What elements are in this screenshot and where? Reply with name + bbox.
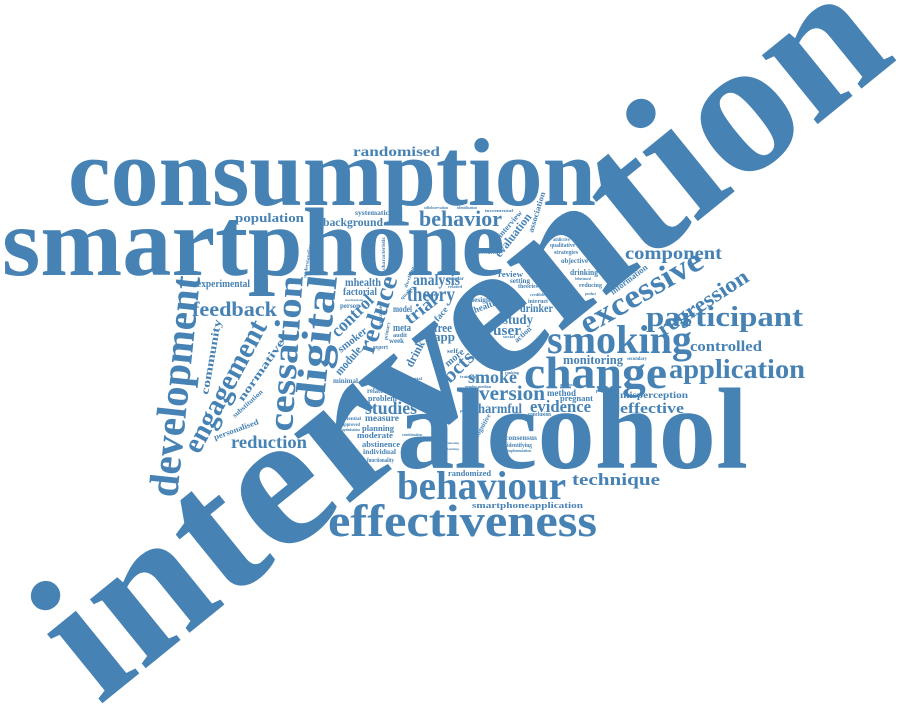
small rotated words: module bbox=[332, 343, 365, 378]
small labelled words: systematic bbox=[355, 209, 389, 217]
word: technique: technique bbox=[572, 470, 661, 489]
word: smartphone: smartphone bbox=[2, 189, 505, 297]
small labelled words: identification bbox=[457, 205, 478, 210]
small labelled words: related bbox=[448, 284, 463, 289]
small labelled words: self bbox=[447, 349, 459, 355]
word: consumption: consumption bbox=[68, 119, 596, 226]
small labelled words: functionality bbox=[367, 458, 394, 464]
small labelled words: misperception bbox=[620, 390, 688, 400]
small labelled words: audit bbox=[393, 333, 407, 339]
word: drinker: drinker bbox=[520, 301, 554, 315]
small labelled words: induction bbox=[374, 381, 388, 385]
word: alcohol: alcohol bbox=[397, 366, 748, 493]
small labelled words: gender median bbox=[465, 384, 492, 389]
small rotated words: cognitive bbox=[473, 412, 493, 439]
small labelled words: meta bbox=[393, 323, 411, 334]
small labelled words: product bbox=[460, 408, 473, 413]
small rotated words: health bbox=[472, 297, 498, 315]
small labelled words: combination bbox=[402, 432, 423, 437]
word: effectiveness: effectiveness bbox=[328, 495, 597, 546]
small rotated words: personalised bbox=[213, 417, 260, 442]
word: study: study bbox=[503, 313, 533, 328]
small labelled words: experimental bbox=[197, 279, 250, 290]
small labelled words: planning bbox=[362, 424, 394, 433]
word: component: component bbox=[625, 243, 722, 263]
small labelled words: mhealth bbox=[345, 275, 381, 289]
small labelled words: internet bbox=[528, 299, 548, 305]
small rotated words bbox=[199, 190, 649, 442]
small labelled words: social bbox=[503, 334, 516, 339]
small labelled words: reducing bbox=[579, 283, 602, 289]
small labelled words: product bbox=[585, 291, 597, 296]
small labelled words: potential bbox=[341, 417, 362, 422]
small rotated words: interview bbox=[496, 208, 524, 239]
small labelled words: expert bbox=[373, 345, 388, 351]
word: reduce: reduce bbox=[351, 272, 403, 357]
word: app: app bbox=[434, 329, 455, 344]
small rotated words: evaluation bbox=[491, 210, 535, 260]
word: excessive: excessive bbox=[573, 242, 710, 342]
small labelled words: credible bbox=[530, 292, 545, 297]
word: reduction: reduction bbox=[231, 432, 307, 452]
small labelled words: addictive bbox=[553, 238, 571, 243]
small labelled words: setting bbox=[510, 277, 530, 285]
small labelled words: review bbox=[498, 270, 523, 279]
small labelled words bbox=[197, 205, 688, 510]
word: theory: theory bbox=[407, 284, 455, 306]
word: harmful: harmful bbox=[478, 402, 522, 417]
word: randomised: randomised bbox=[353, 145, 440, 160]
small labelled words: drinking bbox=[570, 268, 598, 277]
small labelled words: optimisation bbox=[342, 427, 361, 432]
word: user: user bbox=[493, 323, 521, 339]
small labelled words: theories bbox=[518, 284, 539, 290]
small labelled words: objective bbox=[561, 257, 588, 265]
word: feedback: feedback bbox=[192, 297, 277, 321]
small rotated words: substitution bbox=[231, 388, 265, 419]
small labelled words: pregnant bbox=[560, 394, 593, 403]
small labelled words: measure bbox=[365, 413, 399, 423]
word: development: development bbox=[141, 273, 210, 499]
word: smoke: smoke bbox=[468, 367, 517, 387]
word: application: application bbox=[669, 354, 805, 384]
small labelled words: identifying bbox=[507, 443, 532, 449]
small labelled words: method bbox=[547, 388, 576, 398]
small rotated words: more bbox=[443, 346, 467, 369]
small labelled words: factorial bbox=[343, 286, 377, 298]
small rotated words: information bbox=[608, 262, 649, 297]
small labelled words: design bbox=[470, 296, 490, 304]
word: change: change bbox=[524, 347, 667, 398]
small labelled words: individual bbox=[363, 448, 396, 456]
small labelled words: mechanism bbox=[345, 298, 363, 302]
word: analysis: analysis bbox=[413, 272, 460, 289]
small rotated words: action bbox=[512, 324, 534, 344]
small rotated words: face bbox=[432, 305, 450, 323]
small labelled words: training bbox=[460, 374, 476, 379]
small rotated words: normative bbox=[236, 337, 287, 404]
small labelled words: person bbox=[340, 302, 360, 310]
small labelled words: minimal bbox=[333, 377, 358, 385]
word: behaviour: behaviour bbox=[397, 463, 566, 508]
small rotated words: dwelling bbox=[404, 266, 417, 289]
small rotated words: understanding bbox=[303, 243, 314, 278]
small labelled words: conclusion bbox=[528, 412, 552, 418]
small labelled words: implementation bbox=[507, 448, 532, 453]
word: controlled: controlled bbox=[690, 339, 763, 355]
small rotated words: quality bbox=[400, 285, 417, 301]
word: bcts: bcts bbox=[438, 346, 479, 388]
word: version: version bbox=[479, 381, 545, 405]
small labelled words: randomized bbox=[448, 469, 492, 478]
word: trial: trial bbox=[400, 290, 441, 328]
small labelled words: general bbox=[425, 292, 440, 297]
word: free: free bbox=[434, 320, 452, 335]
word: cessation: cessation bbox=[260, 274, 311, 433]
small labelled words: popular bbox=[447, 277, 465, 282]
small labelled words: problem bbox=[368, 394, 397, 403]
small labelled words: alcohol bbox=[560, 382, 575, 387]
small labelled words: planning bbox=[445, 447, 459, 451]
small labelled words: consensus bbox=[505, 434, 537, 442]
word: evidence: evidence bbox=[530, 397, 591, 416]
small labelled words: knowledge bbox=[566, 414, 580, 419]
small rotated words: drink bbox=[402, 338, 428, 369]
small rotated words: smoker bbox=[335, 325, 370, 355]
small labelled words: smartphoneapplication bbox=[472, 501, 584, 510]
word: regression: regression bbox=[652, 264, 753, 341]
word: monitoring: monitoring bbox=[563, 352, 623, 367]
small labelled words: evaluating bbox=[445, 441, 459, 445]
small labelled words: abstinence bbox=[362, 440, 400, 449]
word: engagement: engagement bbox=[177, 314, 274, 458]
small rotated words: characteristic bbox=[382, 236, 387, 270]
small labelled words: secondary bbox=[627, 357, 647, 362]
word: smoking: smoking bbox=[547, 317, 692, 362]
small labelled words: research bbox=[479, 250, 499, 256]
small labelled words: physical bbox=[596, 388, 613, 393]
word: control: control bbox=[327, 290, 378, 341]
word: studies: studies bbox=[365, 398, 417, 418]
small rotated words: association bbox=[526, 190, 547, 234]
word: behavior: behavior bbox=[419, 206, 502, 231]
small labelled words: ranking bbox=[505, 370, 519, 375]
word: background: background bbox=[323, 215, 383, 229]
small labelled words: capital bbox=[408, 376, 423, 381]
small labelled words: behavioural bbox=[575, 276, 592, 281]
small labelled words: related bbox=[367, 387, 387, 395]
word: participant: participant bbox=[646, 301, 803, 333]
small labelled words: week bbox=[389, 337, 404, 345]
small labelled words: moderate bbox=[357, 431, 393, 440]
small labelled words: selfobservation bbox=[424, 205, 449, 210]
small rotated words: community bbox=[199, 318, 224, 396]
small labelled words: model bbox=[393, 304, 412, 314]
word: effective: effective bbox=[620, 401, 684, 417]
small rotated words: primary bbox=[384, 321, 392, 340]
small labelled words: strategies bbox=[554, 250, 579, 256]
small rotated words: outcome bbox=[379, 305, 384, 326]
small labelled words: qualitative bbox=[550, 243, 575, 249]
word: digital: digital bbox=[287, 273, 347, 411]
small labelled words: approved bbox=[342, 423, 360, 428]
word: population: population bbox=[235, 210, 305, 225]
small labelled words: incremental bbox=[485, 208, 514, 213]
